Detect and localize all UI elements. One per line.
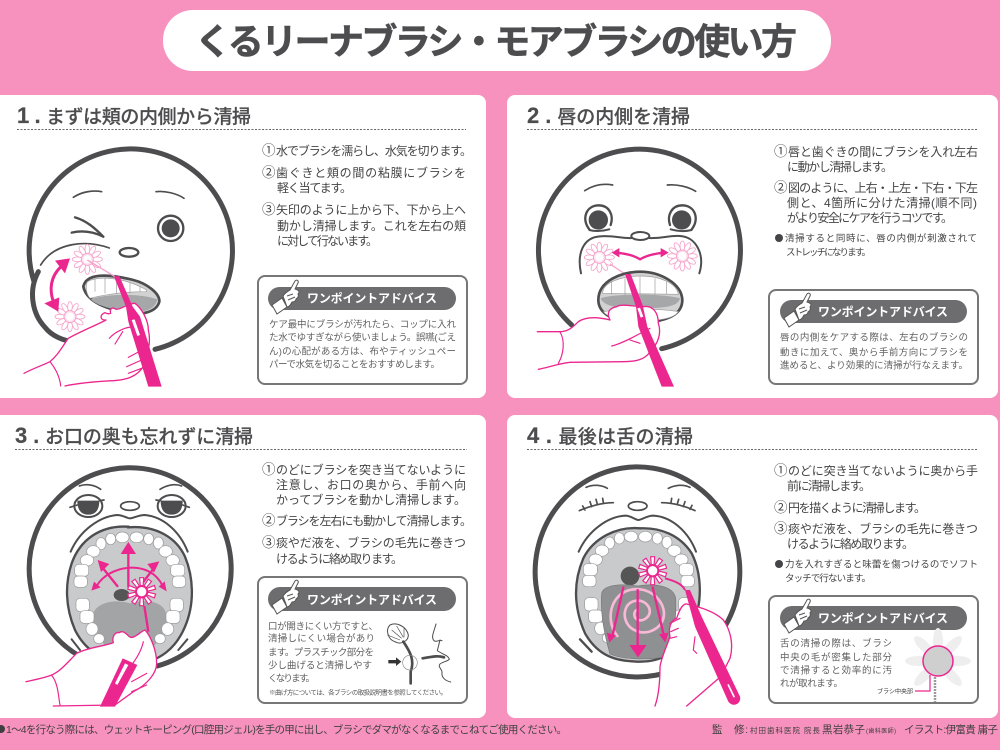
instructions 1: 矢印のように上から下、下から上へ bbox=[276, 203, 466, 217]
panel: step 1 bbox=[0, 95, 486, 398]
instructions 4: タッチで行ないます。 bbox=[785, 572, 871, 584]
instructions 2: ストレッチになります。 bbox=[786, 248, 871, 258]
instructions 2: 清掃すると同時に、唇の内側が刺激されて bbox=[785, 232, 977, 244]
heading 3: 3 . お口の奥も忘れずに清掃 bbox=[15, 423, 253, 448]
advice box 3: ワンポイントアドバイス bbox=[307, 593, 437, 607]
instructions 3: のどにブラシを突き当てないように bbox=[276, 462, 466, 477]
advice box 1: ん)の心配がある方は、布やティッシュペー bbox=[269, 346, 456, 358]
panel background 4 bbox=[507, 415, 998, 718]
advice box 2: 動きに加えて、奥から手前方向にブラシを bbox=[780, 346, 968, 358]
footer credits bbox=[712, 723, 998, 736]
panel background 1 bbox=[0, 95, 486, 398]
instructions 3: かってブラシを動かし清掃します。 bbox=[276, 492, 466, 507]
advice box 4: ワンポイントアドバイス bbox=[818, 612, 948, 626]
panel: step 2 bbox=[507, 95, 998, 398]
instructions 3: けるように絡め取ります。 bbox=[276, 552, 403, 566]
instructions 2: がより安全にケアを行うコツです。 bbox=[787, 210, 953, 225]
instructions 3: ① bbox=[262, 462, 276, 477]
instructions 1: に対して行ないます。 bbox=[277, 234, 378, 248]
advice box 3: ます。プラスチック部分を bbox=[268, 648, 374, 658]
advice box 4 bbox=[769, 596, 978, 703]
instructions 1: ① bbox=[262, 143, 276, 158]
advice box 4: で清掃すると効率的に汚 bbox=[780, 664, 892, 676]
advice box 2: 進めると、より効果的に清掃が行なえます。 bbox=[780, 360, 968, 372]
instructions 1: ③ bbox=[262, 202, 276, 217]
instructions 4: 痰やだ液を、ブラシの毛先に巻きつ bbox=[788, 521, 978, 536]
instructions 2: 図のように、上右・上左・下右・下左 bbox=[788, 180, 978, 195]
icon: bending the brush bbox=[387, 624, 451, 683]
illustration: cheek cleaning bbox=[24, 149, 232, 387]
advice box 4: れが取れます。 bbox=[780, 678, 843, 690]
instructions 4: ③ bbox=[774, 521, 788, 536]
panel background 2 bbox=[507, 95, 998, 398]
footer note: 1～4を行なう際には、ウェットキーピング(口腔用ジェル)を手の甲に出し、ブラシでダマがなくなるまでこねてご使用ください。 bbox=[6, 723, 567, 736]
instructions 2: 唇と歯ぐきの間にブラシを入れ左右 bbox=[788, 144, 978, 159]
instructions 4: ② bbox=[774, 500, 788, 515]
panel background 3 bbox=[0, 415, 486, 718]
instructions 4: 円を描くように清掃します。 bbox=[788, 500, 926, 515]
heading 1: 1 . まずは頬の内側から清掃 bbox=[17, 103, 251, 128]
instructions 1 bbox=[262, 143, 472, 248]
instructions 3 bbox=[262, 462, 472, 566]
panel: step 4 bbox=[507, 415, 998, 718]
instructions 3: ブラシを左右にも動かして清掃します。 bbox=[276, 513, 472, 528]
footer credits: イラスト:伊富貴 庸子 bbox=[904, 723, 998, 736]
instructions 3: ② bbox=[262, 513, 276, 528]
footer credits: 監 修: bbox=[712, 723, 748, 736]
instructions 1: 歯ぐきと頬の間の粘膜にブラシを bbox=[276, 165, 466, 180]
advice box 3: ※曲げ方については、各ブラシの取扱説明書を参照してください。 bbox=[269, 688, 447, 696]
title: くるリーナブラシ・モアブラシの使い方 bbox=[195, 21, 797, 62]
instructions 1: 水でブラシを濡らし、水気を切ります。 bbox=[276, 143, 472, 158]
advice box 4: 舌の清掃の際は、ブラシ bbox=[780, 638, 892, 650]
title bbox=[163, 10, 831, 71]
instructions 2: ② bbox=[774, 180, 788, 195]
instructions 1: 動かし清掃します。これを左右の頬 bbox=[277, 218, 466, 233]
instructions 1: ② bbox=[262, 165, 276, 180]
panel: step 3 bbox=[0, 415, 486, 718]
illustration: back of mouth cleaning bbox=[26, 468, 231, 707]
advice box 2 bbox=[769, 290, 978, 384]
instructions 3: 注意し、お口の奥から、手前へ向 bbox=[276, 477, 466, 492]
instructions 4 bbox=[774, 463, 978, 584]
advice box 1: た水でゆすぎながら使いましょう。誤嚥(ごえ bbox=[269, 332, 456, 344]
instructions 2: に動かし清掃します。 bbox=[787, 159, 893, 174]
advice box 2: 唇の内側をケアする際は、左右のブラシの bbox=[780, 332, 968, 344]
illustration: lip cleaning bbox=[537, 149, 740, 387]
instructions 4: 力を入れすぎると味蕾を傷つけるのでソフト bbox=[785, 558, 978, 570]
illustration: tongue cleaning bbox=[535, 467, 740, 706]
advice box 1: パーで水気を切ることをおすすめします。 bbox=[269, 358, 440, 370]
icon: brush centre photo: ブラシ中央部 bbox=[877, 688, 913, 696]
instructions 3: 痰やだ液を、ブラシの毛先に巻きつ bbox=[276, 535, 466, 550]
instructions 3: ③ bbox=[262, 535, 276, 550]
instructions 4: のどに突き当てないように奥から手 bbox=[788, 464, 978, 478]
advice box 3: くなります。 bbox=[268, 674, 315, 684]
advice box 1: ケア最中にブラシが汚れたら、コップに入れ bbox=[269, 318, 456, 330]
heading 2: 2 . 唇の内側を清掃 bbox=[527, 103, 690, 128]
advice box 1 bbox=[258, 276, 467, 384]
footer credits: 村田歯科医院 院長 bbox=[750, 725, 820, 735]
advice box 3: 清掃しにくい場合があり bbox=[268, 632, 375, 644]
instructions 2: ① bbox=[774, 144, 788, 159]
instructions 2: 側と、4箇所に分けた清掃(順不同) bbox=[787, 195, 977, 210]
heading 4: 4 . 最後は舌の清掃 bbox=[527, 423, 693, 448]
advice box 2: ワンポイントアドバイス bbox=[818, 305, 948, 319]
instructions 4: けるように絡め取ります。 bbox=[787, 537, 914, 551]
instructions 4: 前に清掃します。 bbox=[787, 478, 871, 493]
advice box 3: 口が開きにくい方ですと、 bbox=[268, 620, 378, 632]
advice box 3: 少し曲げると清掃しやす bbox=[268, 660, 372, 672]
advice box 4: 中央の毛が密集した部分 bbox=[780, 652, 892, 664]
footer credits: (歯科医師) bbox=[866, 727, 896, 735]
icon: brush centre photo bbox=[877, 628, 971, 702]
advice box 3 bbox=[258, 577, 467, 703]
advice box 1: ワンポイントアドバイス bbox=[307, 292, 437, 306]
instructions 4: ① bbox=[774, 463, 788, 478]
instructions 2 bbox=[774, 144, 978, 258]
instructions 1: 軽く当てます。 bbox=[277, 181, 352, 195]
footer credits: 黒岩恭子 bbox=[822, 723, 866, 736]
